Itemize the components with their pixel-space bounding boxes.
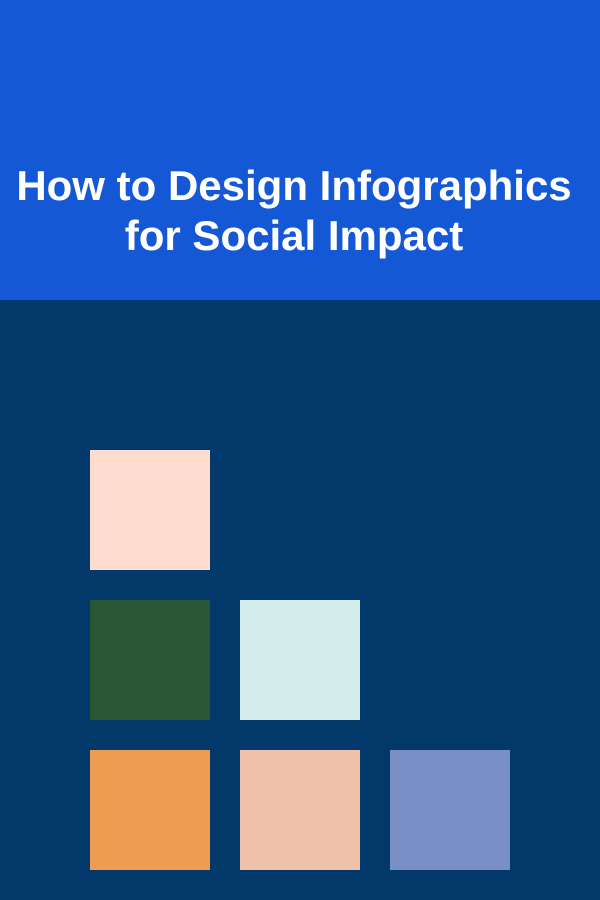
square: periwinkle [390,750,510,870]
title: for Social Impact [125,212,463,259]
square: peach [90,450,210,570]
title [16,162,572,259]
lower panel: square grid [0,300,600,900]
square: orange [90,750,210,870]
square: light salmon [240,750,360,870]
title: How to Design Infographics [16,162,572,209]
square: pale aqua [240,600,360,720]
square: dark green [90,600,210,720]
header panel [0,0,600,300]
